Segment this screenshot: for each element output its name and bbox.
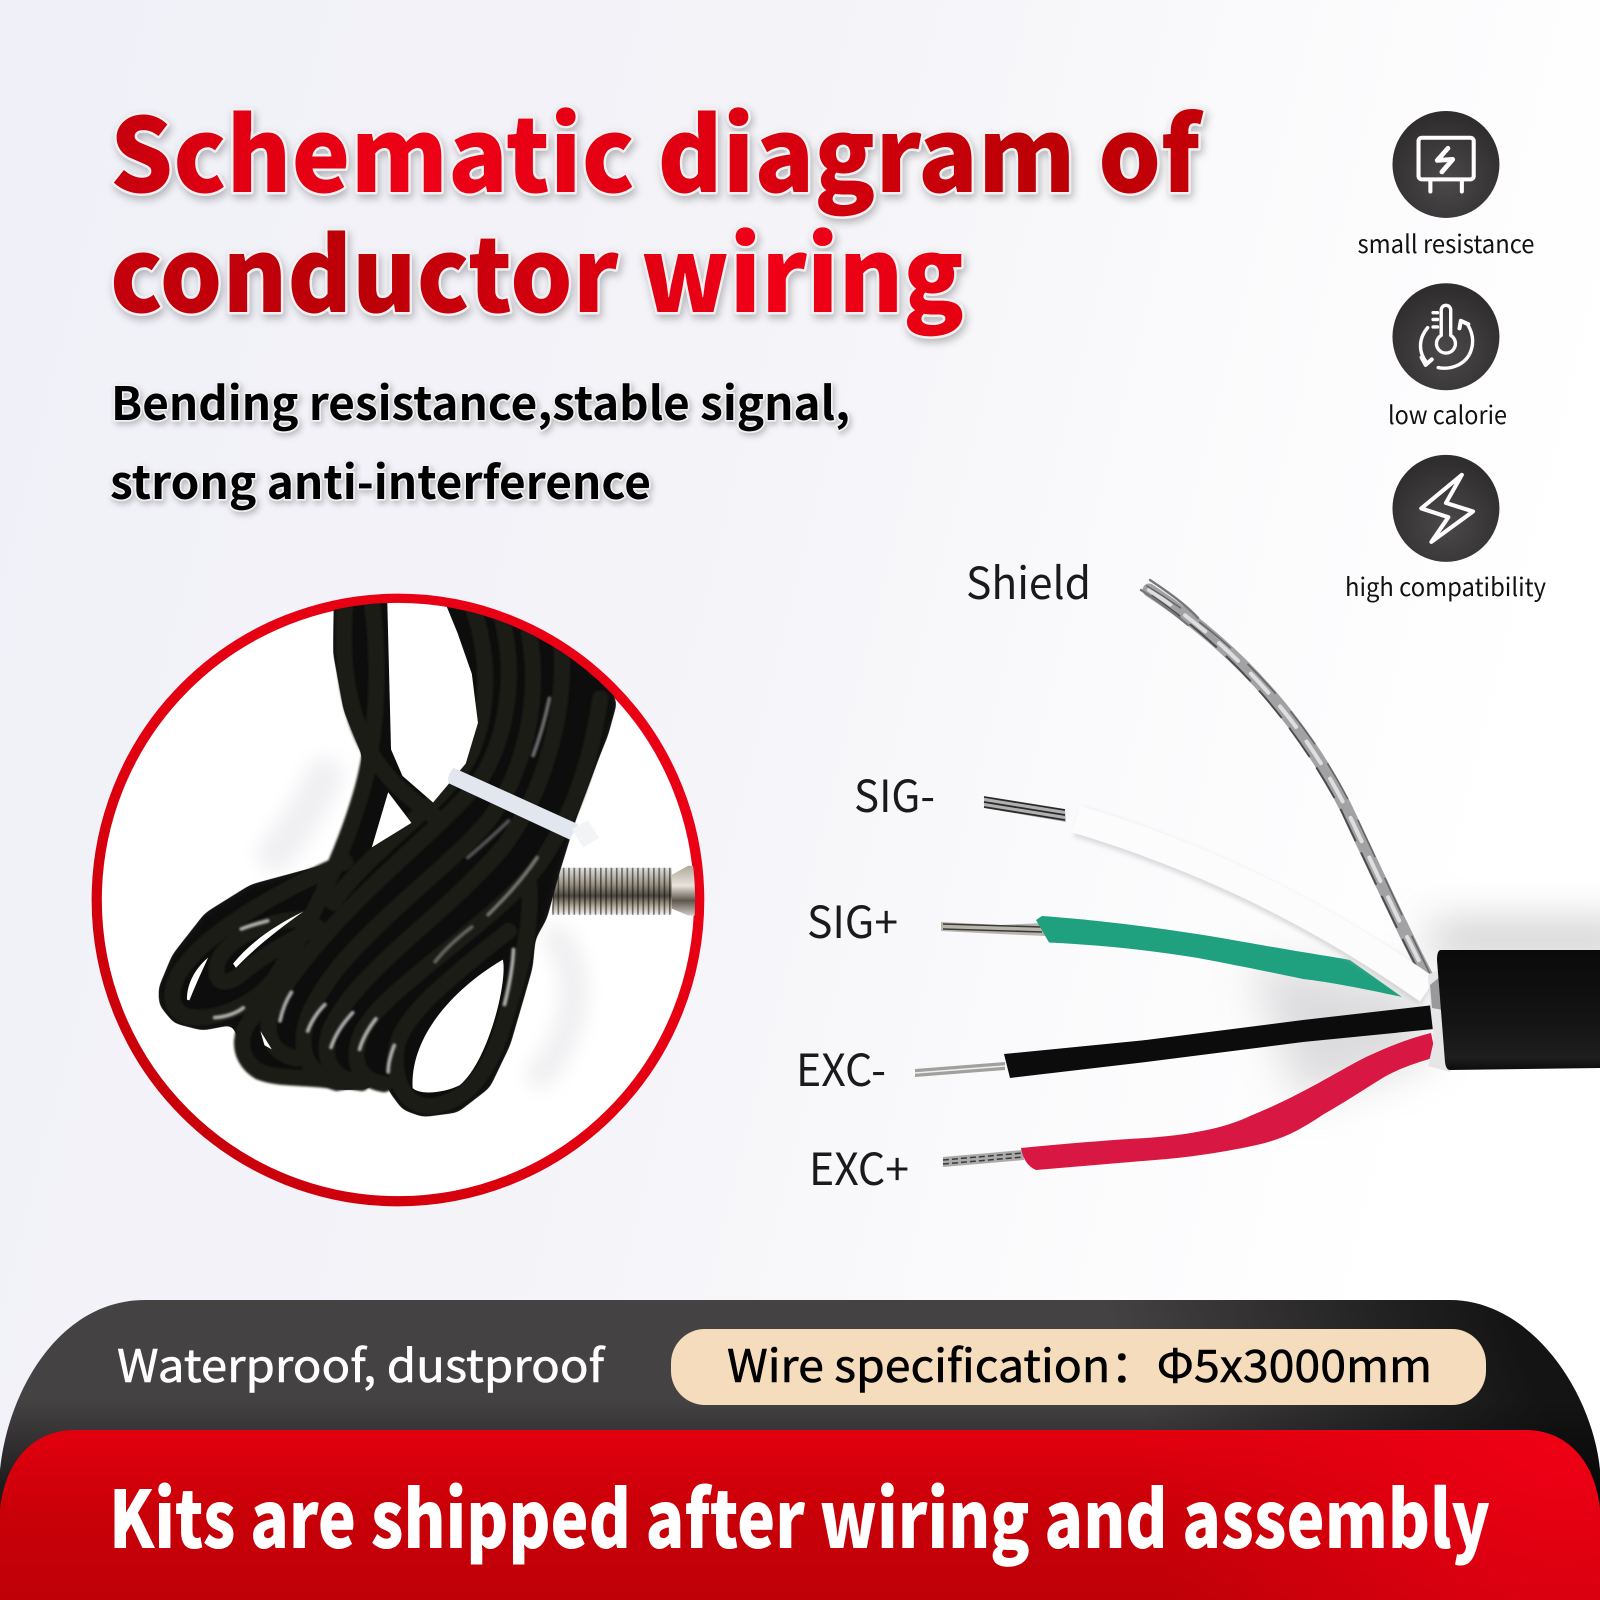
- dark band: [0, 1300, 1600, 1600]
- feature: high compatibility: high compatibility: [1345, 568, 1546, 604]
- exposed shield: [1428, 968, 1450, 1072]
- icon: capacitor with bolt: [1392, 111, 1499, 218]
- black jacket: [1437, 950, 1600, 1070]
- subtitle: strong anti-interference: [110, 447, 651, 513]
- text: waterproof: Waterproof, dustproof: [117, 1330, 607, 1395]
- cable tie: [448, 768, 599, 847]
- wire labels: EXC-: [796, 1035, 886, 1099]
- highlights: [215, 698, 549, 1072]
- black wire EXC-: [915, 1005, 1434, 1078]
- feature: small resistance: [1358, 111, 1534, 261]
- feature: low calorie: [1388, 283, 1507, 432]
- wire labels: EXC+: [809, 1134, 909, 1198]
- wire photo: [915, 580, 1600, 1170]
- feature: small resistance: small resistance: [1358, 225, 1534, 261]
- cable coil: [158, 588, 709, 1117]
- title: conductor wiring: [110, 195, 964, 342]
- red band: [0, 1430, 1600, 1600]
- white gaps between cables: [187, 588, 504, 1093]
- green wire SIG+: [941, 916, 1402, 997]
- feature: high compatibility: [1345, 455, 1546, 604]
- cable silhouette: [158, 588, 617, 1117]
- wire labels: SIG-: [854, 761, 935, 825]
- red wire EXC+: [943, 1033, 1436, 1170]
- wire labels: [796, 548, 1091, 1198]
- shield wire: [1141, 580, 1434, 986]
- title: Schematic diagram of: [110, 75, 1204, 222]
- individual strands: [172, 600, 600, 1106]
- pill: wire specification: Wire specification：Φ5x3000mm: [727, 1330, 1432, 1395]
- feature: low calorie: low calorie: [1388, 396, 1507, 432]
- subtitle: [110, 368, 850, 513]
- wire labels: Shield: [966, 548, 1091, 612]
- photo: coiled cable in red ring: [97, 588, 709, 1201]
- white wire SIG-: [984, 797, 1428, 993]
- subtitle: Bending resistance,stable signal,: [111, 368, 850, 434]
- wire labels: SIG+: [807, 887, 898, 951]
- icon: thermometer with cycle arrows: [1392, 283, 1499, 390]
- title: [110, 75, 1204, 342]
- connector: [551, 866, 709, 916]
- icon: lightning bolt: [1392, 455, 1499, 562]
- cable shadow: [1250, 925, 1600, 1100]
- red ring: [97, 599, 699, 1201]
